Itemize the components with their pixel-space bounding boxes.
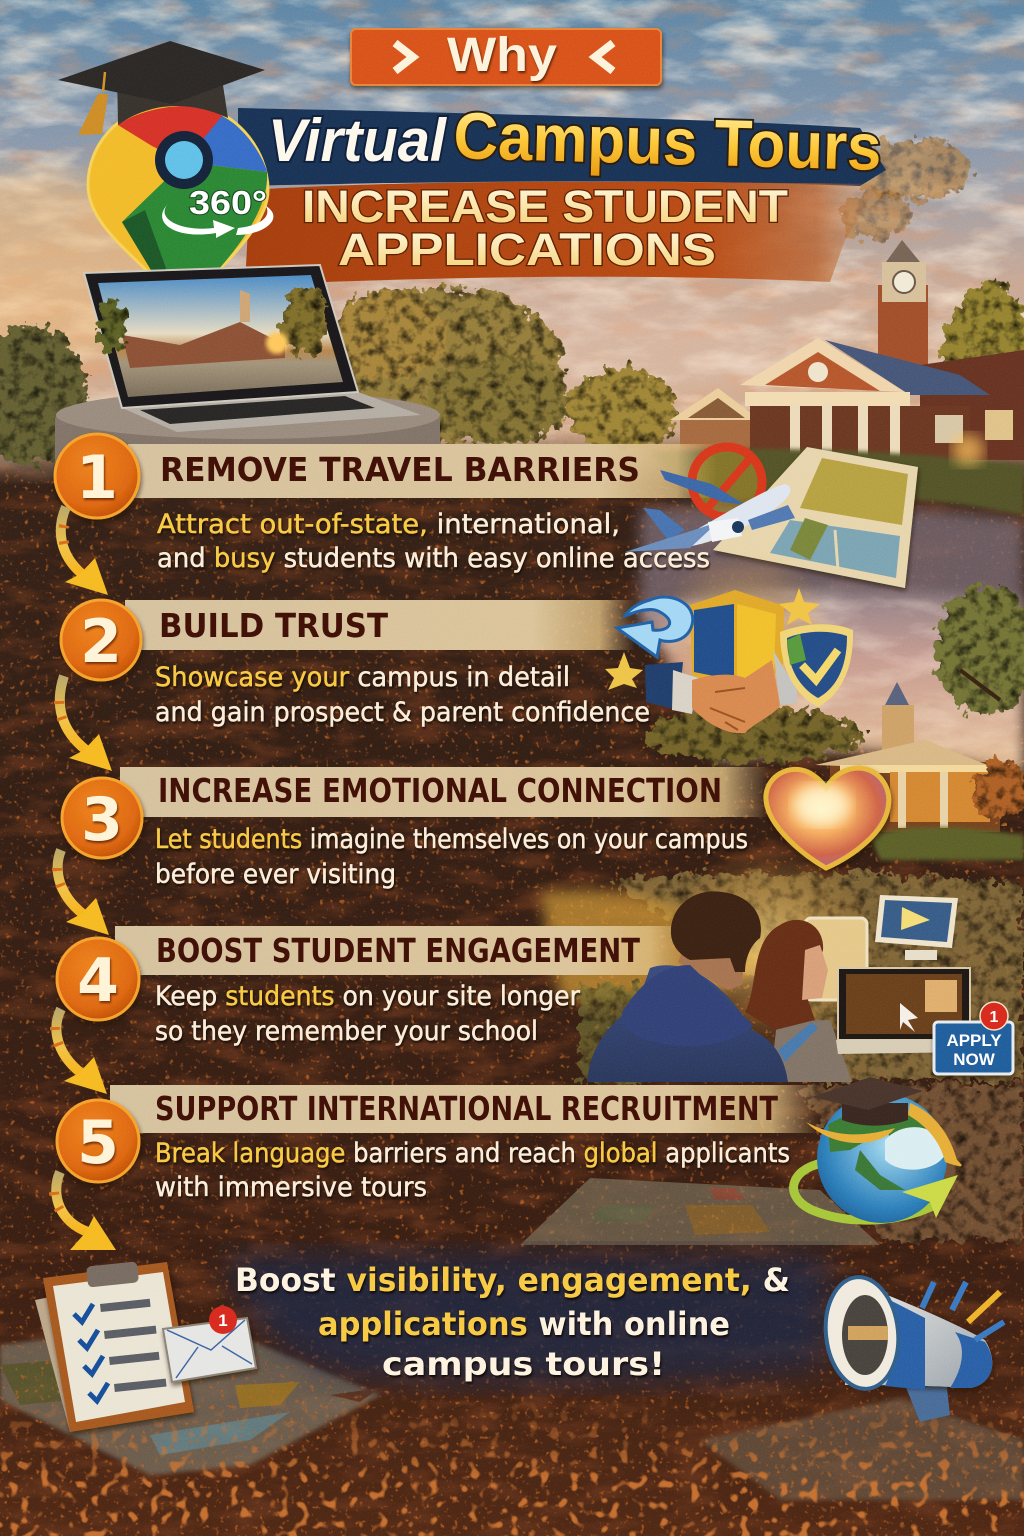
play monitor <box>875 895 958 960</box>
step 5 body: Break language barriers and reach global applicants <box>155 1138 790 1169</box>
step 1 number: 1 <box>76 443 118 513</box>
subtitle banner: Increase Student Applications <box>245 181 880 285</box>
pin lens <box>155 131 213 189</box>
icon: laptop with campus on screen <box>84 265 421 432</box>
subtitle line 1: INCREASE STUDENT <box>302 181 788 232</box>
button: Why <box>351 29 661 85</box>
laptop with interior <box>836 968 975 1054</box>
step 4 number: 4 <box>77 946 119 1016</box>
step 4 body: Keep students on your site longer <box>155 981 581 1012</box>
icon: graduation cap <box>58 41 265 135</box>
map <box>713 447 918 588</box>
cap <box>812 1077 923 1126</box>
footer call to action <box>235 1261 790 1383</box>
step 5 heading: SUPPORT INTERNATIONAL RECRUITMENT <box>155 1089 778 1128</box>
360 label: 360° <box>189 184 267 221</box>
step 1 number <box>55 434 139 518</box>
step 1 body <box>157 509 710 574</box>
check shield <box>780 624 853 707</box>
connector arrow 4 to 5 <box>55 1009 107 1094</box>
step 1 body: and busy students with easy online access <box>157 543 710 574</box>
pedestal <box>55 391 440 462</box>
icon: megaphone <box>820 1274 1004 1422</box>
icon: clipboard checklist <box>35 1261 194 1432</box>
checklist lines <box>100 1299 167 1392</box>
right side road and foliage <box>640 505 1024 625</box>
shield <box>690 590 784 690</box>
step 2 number: 2 <box>80 607 122 677</box>
footer call to action: Boost visibility, engagement, & <box>235 1261 790 1299</box>
step 2 <box>59 600 650 771</box>
small stars <box>779 588 820 625</box>
trees around the campus <box>0 140 1024 763</box>
handshake <box>645 650 797 733</box>
panel behind students <box>805 918 867 1000</box>
illustration: students viewing the virtual tour <box>587 845 1013 1082</box>
title text: Virtual <box>268 107 447 174</box>
step 1 body: Attract out-of-state, international, <box>157 509 620 540</box>
step 5 <box>54 1085 820 1250</box>
yellow ribbon <box>806 1103 962 1166</box>
plane <box>625 470 795 552</box>
checklist rows <box>74 1304 108 1401</box>
step 2 heading strip <box>125 600 635 650</box>
footer navy band <box>225 1254 830 1384</box>
connector arrow 5 to footer <box>54 1172 116 1250</box>
icon: glowing heart <box>766 768 889 868</box>
notification badge: 1 <box>990 1009 999 1026</box>
step 3 <box>57 767 770 935</box>
step 1 heading strip <box>128 444 718 498</box>
sound rays <box>922 1282 1004 1340</box>
subtitle line 2: APPLICATIONS <box>338 224 716 275</box>
step 3 body: before ever visiting <box>155 859 396 890</box>
step 4 body: so they remember your school <box>155 1016 538 1047</box>
step 5 body: with immersive tours <box>155 1172 427 1203</box>
icon: envelope with notification: 1 <box>218 1311 228 1330</box>
apply now button <box>934 1022 1013 1074</box>
step 5 heading strip <box>110 1085 820 1133</box>
chevrons <box>395 43 613 71</box>
globe <box>817 1093 947 1223</box>
apply now button: APPLY <box>946 1031 1002 1050</box>
icon: map pin 360 <box>88 103 273 285</box>
step 3 heading strip <box>120 767 770 817</box>
step 4 number <box>57 938 139 1020</box>
star <box>605 652 643 690</box>
second campus building <box>815 682 1024 860</box>
curved arrow <box>617 597 693 657</box>
step 3 body <box>155 824 748 890</box>
icon: envelope with notification <box>163 1306 256 1382</box>
notification badge <box>980 1002 1008 1030</box>
step 2 body <box>155 662 650 728</box>
icon: globe with cap and arrow <box>794 1077 962 1223</box>
campus building with clock tower <box>650 240 1024 515</box>
step 3 number <box>62 778 142 858</box>
step 4 <box>55 926 690 1094</box>
step 3 number: 3 <box>81 785 123 855</box>
laptop base <box>122 392 421 432</box>
Why label: Why <box>447 29 557 82</box>
step 2 heading: BUILD TRUST <box>159 606 388 645</box>
step 2 number <box>61 600 141 680</box>
green arrow <box>902 1175 958 1218</box>
icon: no travel plane and map <box>625 447 918 588</box>
title highlight: Campus Tours <box>453 98 883 184</box>
no sign <box>692 447 762 517</box>
rotation arrows <box>162 204 273 238</box>
step 2 body: and gain prospect & parent confidence <box>155 697 650 728</box>
step 5 body <box>155 1138 790 1203</box>
step 1 <box>55 434 718 595</box>
step 5 number <box>57 1100 139 1182</box>
footer call to action: applications with online <box>318 1305 730 1343</box>
step 4 body <box>155 981 581 1047</box>
footer call to action: campus tours! <box>382 1345 665 1383</box>
step 3 body: Let students imagine themselves on your campus <box>155 824 748 855</box>
apply now button: NOW <box>953 1050 996 1069</box>
connector arrow 2 to 3 <box>59 676 112 771</box>
boy <box>587 891 788 1082</box>
girl <box>745 920 852 1082</box>
map on ground, right <box>700 1398 1024 1500</box>
icon: trust shield and handshake <box>605 550 853 733</box>
title banner: Virtual Campus Tours <box>238 98 886 186</box>
map on ground, centre <box>520 1178 880 1245</box>
step 4 heading strip <box>115 926 690 975</box>
step 4 heading: BOOST STUDENT ENGAGEMENT <box>156 931 640 970</box>
screen building <box>122 322 285 368</box>
connector arrow 1 to 2 <box>61 507 108 595</box>
green ring <box>794 1162 935 1220</box>
map on ground, left <box>0 1340 380 1475</box>
step 5 number: 5 <box>77 1108 119 1178</box>
step 3 heading: INCREASE EMOTIONAL CONNECTION <box>158 771 722 810</box>
step 2 body: Showcase your campus in detail <box>155 662 570 693</box>
connector arrow 3 to 4 <box>57 850 109 935</box>
step 1 heading: REMOVE TRAVEL BARRIERS <box>160 450 640 489</box>
